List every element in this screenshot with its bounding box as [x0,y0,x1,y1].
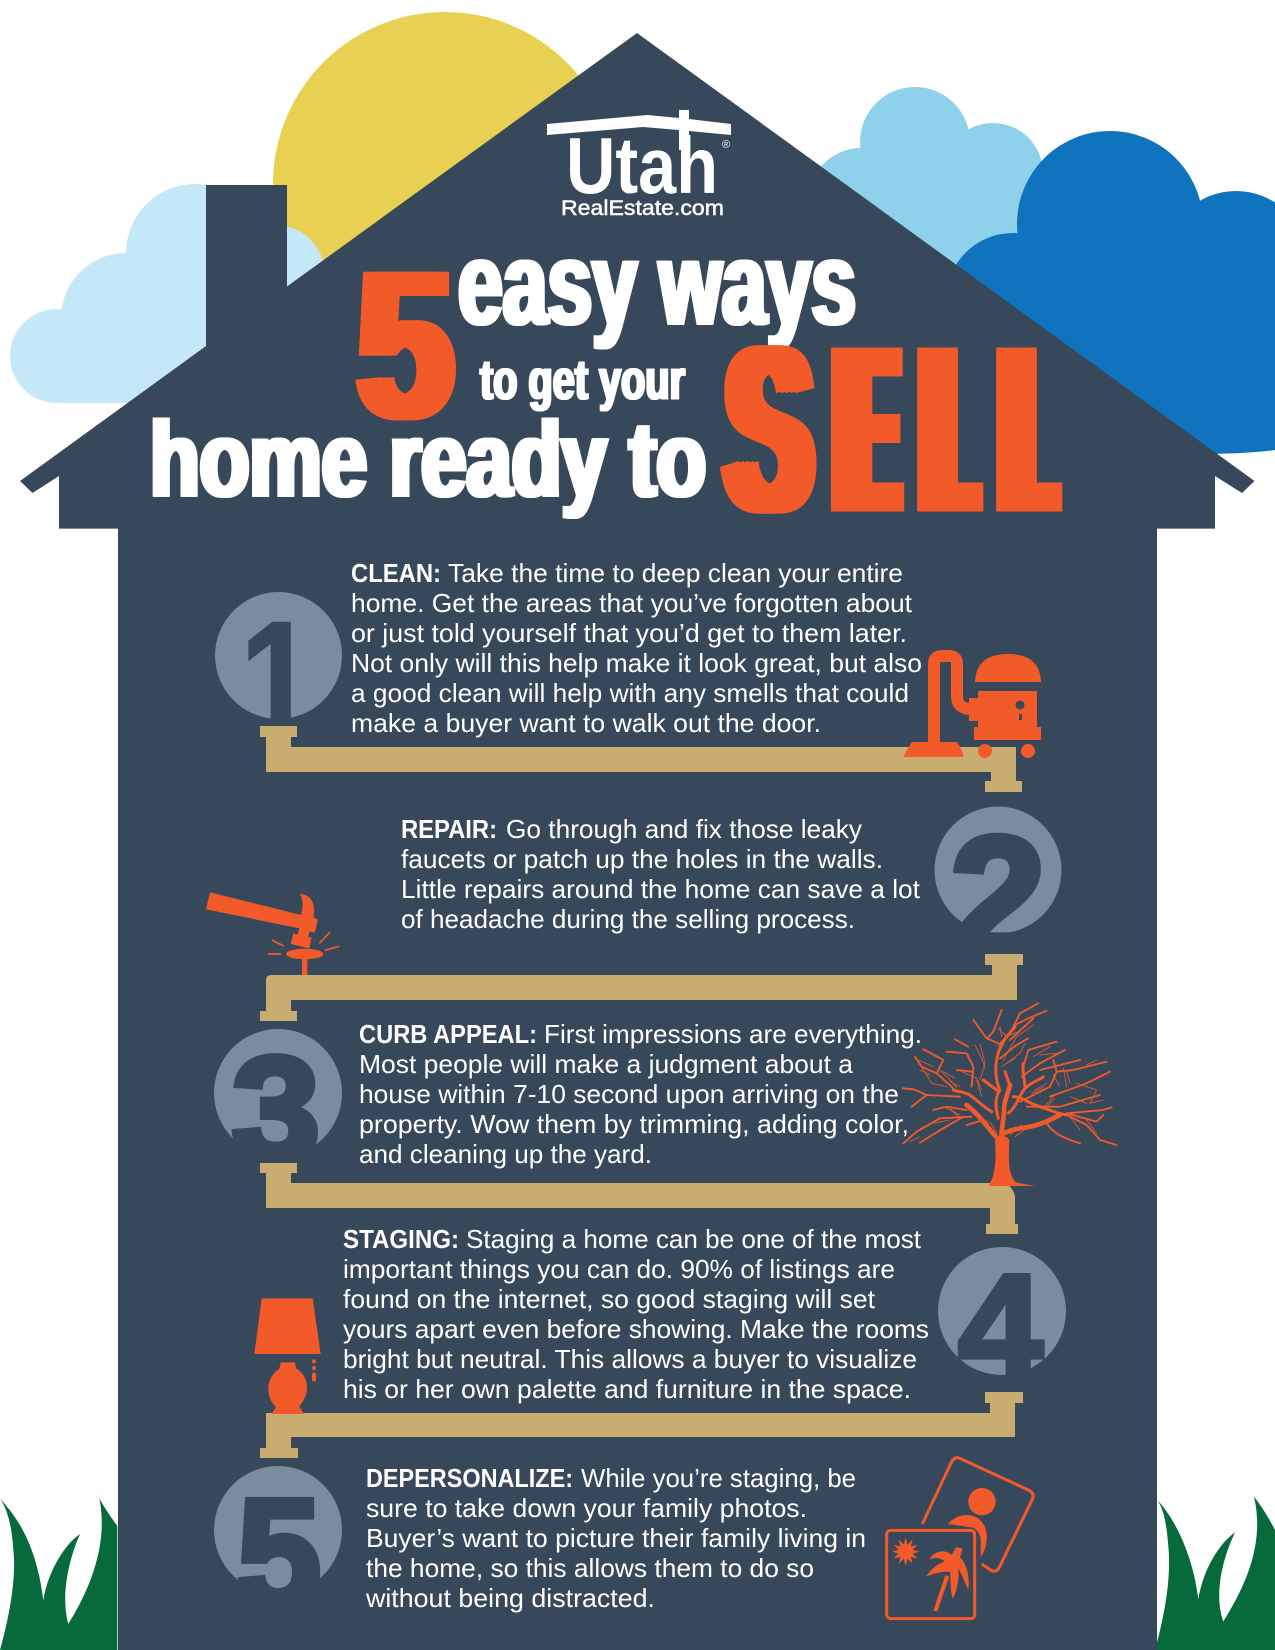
step 2: repair text: faucets or patch up the holes in the walls. [401,844,883,874]
step 1: clean text: make a buyer want to walk out the door. [351,708,821,738]
step 3: curb appeal text: house within 7-10 second upon arriving on the [359,1079,899,1109]
title: 5 easy ways to get your home ready to SELL: to get your [480,348,685,412]
pipe connector 1 [260,726,1022,792]
title: 5 easy ways to get your home ready to SELL: easy ways [458,218,856,350]
step 2: repair text: REPAIR: [401,814,497,844]
step 3: number badge: 3 [232,1027,320,1192]
step 4: staging text: yours apart even before showing. Make the rooms [343,1314,929,1344]
title: 5 easy ways to get your home ready to SELL: 5 [358,229,453,462]
step 5: number badge [214,1466,342,1640]
logo: Utah RealEstate.com [547,110,731,220]
step 4: number badge [938,1243,1066,1410]
step 4: number badge: 4 [958,1243,1043,1410]
step 1: clean text: or just told yourself that you’d get to them later. [351,618,907,648]
step 1: clean text: Not only will this help make it look great, but also [351,648,922,678]
step 1: clean text: Take the time to deep clean your entire [448,558,903,588]
step 3: curb appeal text: First impressions are everything. [544,1019,922,1049]
step 1: clean text: a good clean will help with any smells that could [351,678,909,708]
step 5: depersonalize text [365,1463,866,1613]
step 4: staging text: STAGING: [343,1224,459,1254]
icon: sun [273,12,617,356]
step 2: repair text: of headache during the selling process. [401,904,855,934]
title: 5 easy ways to get your home ready to SELL: home ready to [150,399,706,519]
icon: hammer and nail [206,892,339,976]
step 1: clean text [351,558,922,738]
logo: Utah RealEstate.com: ® [722,139,730,151]
title: 5 easy ways to get your home ready to SELL: E [841,298,892,560]
step 3: curb appeal text: and cleaning up the yard. [359,1139,652,1169]
icon: grass right [1155,1497,1275,1650]
step 5: depersonalize text: the home, so this allows them to do so [366,1553,814,1583]
step 3: curb appeal text: Most people will make a judgment about a [359,1049,854,1079]
step 4: staging text: his or her own palette and furniture in the space. [343,1374,911,1404]
step 4: staging text: bright but neutral. This allows a buyer to visualize [343,1344,917,1374]
icon: dark blue cloud right [946,131,1275,454]
step 5: depersonalize text: DEPERSONALIZE: [366,1463,573,1493]
step 3: curb appeal text: property. Wow them by trimming, adding color, [359,1109,909,1139]
icon: grass left [0,1498,117,1650]
icon: vacuum cleaner [904,654,1041,758]
step 4: staging text [343,1224,929,1404]
step 4: staging text: Staging a home can be one of the most [466,1224,922,1254]
step 5: depersonalize text: without being distracted. [365,1583,655,1613]
icon: light cloud left [10,184,325,403]
step 1: clean text: CLEAN: [351,558,441,588]
title: 5 easy ways to get your home ready to SELL: S [727,298,811,560]
icon: table lamp [254,1298,321,1414]
icon: bare tree [903,1003,1117,1186]
pipe connector 2 [260,954,1023,1021]
title: 5 easy ways to get your home ready to SELL: L [928,298,970,560]
step 2: repair text: Go through and fix those leaky [506,814,862,844]
step 4: staging text: found on the internet, so good staging will set [343,1284,876,1314]
step 4: staging text: important things you can do. 90% of listings are [343,1254,895,1284]
step 5: number badge: 5 [237,1467,321,1640]
step 1: clean text: home. Get the areas that you’ve forgotten about [351,588,913,618]
step 2: number badge: 2 [950,802,1046,992]
pipe connector 4 [260,1392,1023,1458]
step 3: curb appeal text [359,1019,922,1169]
logo: Utah RealEstate.com: RealEstate.com [561,196,724,220]
step 5: depersonalize text: While you’re staging, be [581,1463,856,1493]
title: 5 easy ways to get your home ready to SELL [150,218,1049,560]
text: L [1007,298,1049,560]
step 3: curb appeal text: CURB APPEAL: [359,1019,537,1049]
icon: family photo frames [887,1458,1033,1619]
pipe connector 3 [260,1163,1018,1234]
step 5: depersonalize text: sure to take down your family photos. [366,1493,807,1523]
step 3: number badge [214,1027,342,1192]
logo: Utah RealEstate.com: Utah [566,121,718,210]
step 2: repair text [401,814,921,934]
icon: medium blue cloud right [809,87,1043,400]
step 5: depersonalize text: Buyer’s want to picture their family living in [366,1523,866,1553]
step 2: repair text: Little repairs around the home can save a lot [401,874,921,904]
step 1: number badge: 1 [240,588,315,773]
